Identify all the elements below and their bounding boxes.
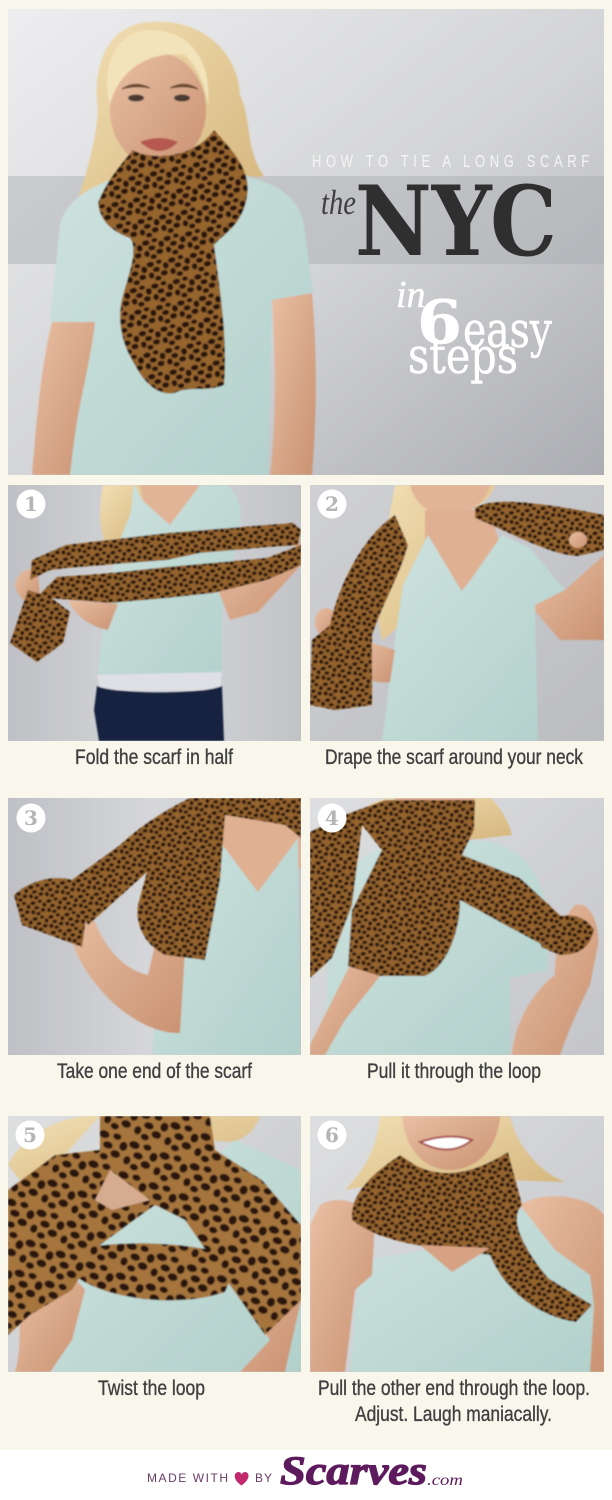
step 1 badge xyxy=(16,490,46,518)
panel: step 4 xyxy=(310,798,604,1083)
step 5 badge: 5 xyxy=(23,1123,37,1147)
panel: step 6 xyxy=(310,1116,604,1426)
step 1 backdrop xyxy=(8,485,301,741)
footer xyxy=(0,1448,612,1500)
panel: step 3 xyxy=(8,798,301,1083)
step 2 badge xyxy=(318,490,346,518)
brand logo: Scarves.com: Scarves xyxy=(280,1448,427,1493)
panel: hero xyxy=(8,9,604,475)
step 3 photo: holding one end of scarf xyxy=(14,798,301,1055)
brand logo: Scarves.com: .com xyxy=(427,1472,463,1489)
kicker: how to tie a long scarf: HOW TO TIE A LONG SCARF xyxy=(312,152,589,172)
step 6 caption: Adjust. Laugh maniacally. xyxy=(355,1402,552,1426)
step 4 badge: 4 xyxy=(325,806,339,830)
panel: step 2 xyxy=(310,485,604,769)
subtitle: in 6 easy steps: easy xyxy=(463,301,553,359)
subtitle: in 6 easy steps: steps xyxy=(408,327,518,385)
hero photo: woman in leopard scarf xyxy=(32,22,316,475)
subtitle: in 6 easy steps xyxy=(396,274,553,385)
step 3 caption: Take one end of the scarf xyxy=(57,1059,252,1083)
step 3 backdrop xyxy=(8,798,301,1055)
subtitle: in 6 easy steps: in xyxy=(396,274,426,316)
step 4 caption: Pull it through the loop xyxy=(367,1059,541,1083)
step 4 badge xyxy=(318,804,346,832)
step 6 caption xyxy=(318,1376,590,1426)
step 6 badge xyxy=(318,1120,346,1150)
step 2 badge: 2 xyxy=(325,492,339,516)
step 5 caption: Twist the loop xyxy=(98,1376,205,1400)
step 6 badge: 6 xyxy=(325,1123,339,1147)
panel: step 1 xyxy=(8,485,301,769)
step 5 badge xyxy=(16,1120,44,1150)
step 5 photo: twisting the loop xyxy=(8,1116,301,1372)
step 1 badge: 1 xyxy=(24,492,38,516)
title: NYC: NYC xyxy=(355,165,557,278)
credit: made with: MADE WITH xyxy=(147,1471,228,1485)
title: the: the xyxy=(321,183,356,222)
step 3 badge: 3 xyxy=(24,806,38,830)
step 4 backdrop xyxy=(310,798,604,1055)
hero backdrop xyxy=(8,9,604,475)
step 6 photo: pulling the other end through xyxy=(310,1116,604,1372)
step 5 backdrop xyxy=(8,1116,301,1372)
step 1 caption: Fold the scarf in half xyxy=(75,745,233,769)
step 2 photo: scarf draped around neck xyxy=(310,485,604,741)
step 4 photo: pulling scarf through the loop xyxy=(310,798,598,1055)
step 1 photo: scarf folded in half xyxy=(10,485,301,741)
step 6 backdrop xyxy=(310,1116,604,1372)
credit: by: BY xyxy=(255,1471,272,1485)
step 2 backdrop xyxy=(310,485,604,741)
icon: heart xyxy=(235,1472,249,1486)
title band xyxy=(8,176,604,264)
footer background xyxy=(0,1450,612,1500)
step 3 badge xyxy=(16,804,46,832)
brand logo: Scarves.com xyxy=(280,1448,463,1493)
subtitle: in 6 easy steps: 6 xyxy=(417,288,462,358)
panel: step 5 xyxy=(8,1116,301,1400)
